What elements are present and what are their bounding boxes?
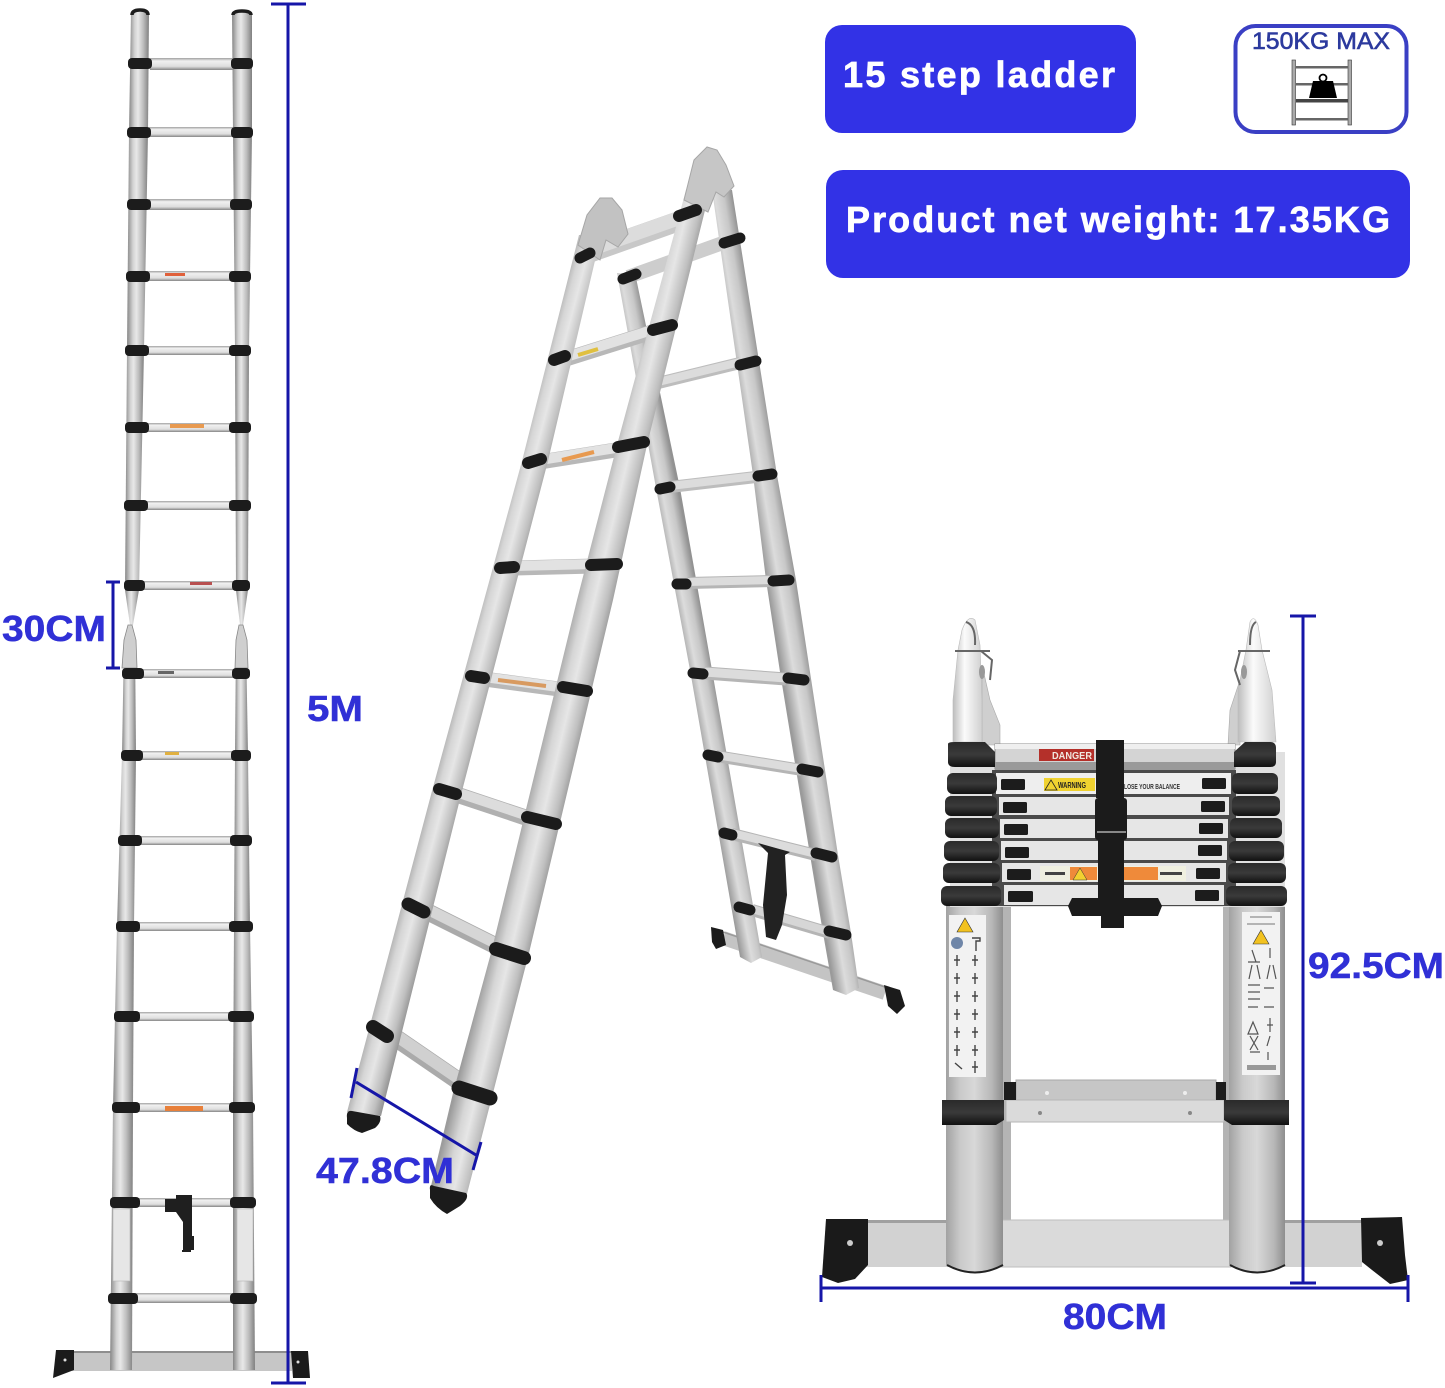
dimension: 47.8CM depth — [316, 1068, 481, 1191]
dimension: 47.8CM depth: 47.8CM — [316, 1150, 454, 1191]
hanging strap — [758, 843, 790, 940]
badge: 150KG max load: 150KG MAX — [1252, 28, 1390, 55]
hinge head front — [684, 147, 734, 212]
rung labels — [158, 273, 212, 1111]
second rung — [1004, 1080, 1226, 1122]
base bar — [822, 1217, 1408, 1284]
rubber feet — [347, 1111, 467, 1214]
rung stack — [992, 770, 1236, 906]
warning label: LOSE YOUR BALANCE — [1124, 782, 1180, 791]
dimension: 5M height: 5M — [307, 688, 363, 729]
right tube — [1229, 905, 1285, 1272]
tube section under top band — [950, 752, 1285, 907]
black bands left — [108, 58, 152, 1304]
badge: 150KG max load — [1236, 26, 1406, 132]
back bands — [623, 238, 846, 935]
black telescopic bands right — [1226, 742, 1287, 906]
badge: product net weight — [826, 170, 1410, 278]
rear rails — [1002, 905, 1232, 1221]
icon: ladder with weight — [1292, 60, 1352, 125]
hinge head back — [578, 198, 628, 260]
back rungs — [650, 362, 830, 933]
lower bands — [942, 1100, 1289, 1125]
rung labels — [498, 349, 598, 686]
step slots — [1001, 778, 1226, 902]
securing strap — [1068, 740, 1162, 928]
right hinge — [1228, 619, 1276, 745]
front left rail — [347, 235, 601, 1116]
warning label — [1044, 778, 1180, 791]
front rungs — [390, 217, 682, 1082]
right safety sticker — [1242, 912, 1280, 1075]
fold strap — [165, 1195, 194, 1252]
base bar — [53, 1350, 310, 1378]
danger label — [1039, 749, 1094, 762]
rungs — [132, 58, 235, 1303]
left tube — [946, 905, 1003, 1272]
hinge joint right — [235, 625, 248, 668]
dimension: 30CM rung spacing: 30CM — [2, 608, 106, 649]
black telescopic bands left — [941, 742, 1001, 906]
dimension: 30CM rung spacing — [2, 582, 120, 668]
front bands — [373, 210, 696, 1098]
front right rail — [431, 190, 710, 1194]
dimension: 80CM base width — [821, 1275, 1408, 1337]
dimension: 80CM base width: 80CM — [1063, 1296, 1167, 1337]
left hinge — [953, 618, 1000, 745]
back top rung — [628, 240, 731, 277]
front frame — [347, 147, 734, 1214]
top rung — [995, 744, 1235, 770]
back foot bar — [711, 927, 905, 1014]
ladder: fully extended straight ladder — [53, 10, 310, 1378]
left safety sticker — [949, 915, 986, 1077]
danger label: DANGER — [1052, 751, 1093, 762]
orange caution label — [1040, 866, 1186, 881]
warning label: WARNING — [1058, 781, 1086, 790]
black bands right — [228, 58, 257, 1304]
hinge joint left — [122, 625, 137, 668]
back left rail — [617, 273, 762, 963]
right rail — [232, 12, 255, 1370]
dimension: 5M height — [271, 4, 363, 1383]
badge: 15 step ladder: 15 step ladder — [843, 54, 1115, 95]
left rail — [110, 12, 149, 1370]
rail top caps — [132, 10, 251, 15]
back right rail — [712, 190, 859, 995]
ladder: compact folded view — [822, 618, 1408, 1284]
badge: product net weight: Product net weight: 17.35KG — [846, 199, 1390, 240]
dimension: 92.5CM folded height — [1290, 616, 1444, 1283]
badge: 15 step ladder — [825, 25, 1136, 133]
dimension: 92.5CM folded height: 92.5CM — [1308, 945, 1444, 986]
safety stickers — [113, 1209, 253, 1281]
ladder: A-frame configuration — [347, 147, 905, 1214]
back frame — [617, 190, 905, 1014]
